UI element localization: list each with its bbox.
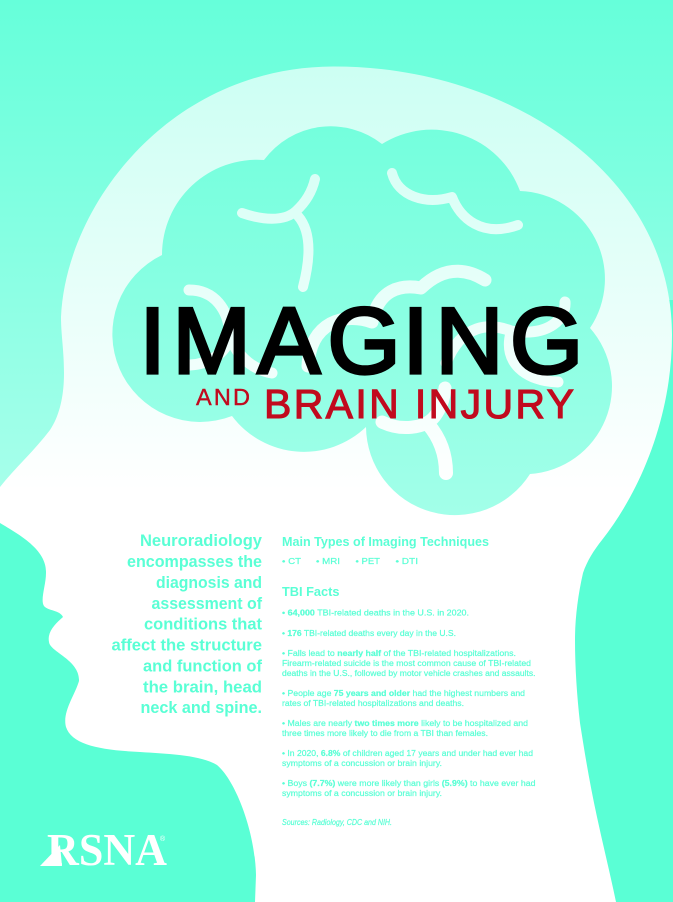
- text block: TBI facts: rates of TBI-related hospitalizations and deaths.: [282, 698, 464, 708]
- text block: TBI facts: • Males are nearly two times more likely to be hospitalized and: [282, 718, 528, 728]
- subtitle: and brain injury: AND: [196, 384, 250, 410]
- subtitle: and brain injury: BRAIN INJURY: [264, 381, 574, 427]
- neck back shape: [540, 300, 673, 902]
- text block: TBI facts: Firearm-related suicide is the most common cause of TBI-related: [282, 658, 531, 668]
- text block: TBI facts: three times more likely to die from a TBI than females.: [282, 728, 488, 738]
- text block: TBI facts: • In 2020, 6.8% of children aged 17 years and under had ever had: [282, 748, 533, 758]
- text block: TBI facts: • 176 TBI-related deaths every day in the U.S.: [282, 628, 456, 638]
- text block: neuroradiology description: conditions that: [144, 616, 262, 634]
- text block: neuroradiology description: neck and spine.: [140, 699, 262, 717]
- text block: TBI facts: • Boys (7.7%) were more likely than girls (5.9%) to have ever had: [282, 778, 536, 788]
- text block: neuroradiology description: the brain, head: [143, 678, 262, 696]
- panel: brain illustration: [112, 126, 612, 515]
- text block: neuroradiology description: [112, 532, 263, 717]
- logo: RSNA: RSNA: [47, 825, 167, 875]
- text block: neuroradiology description: and function of: [143, 658, 262, 676]
- text block: neuroradiology description: diagnosis and: [156, 574, 262, 592]
- list: imaging techniques: • DTI: [396, 556, 418, 566]
- text block: TBI facts: [282, 608, 536, 798]
- list: imaging techniques: [282, 556, 418, 566]
- text block: neuroradiology description: Neuroradiology: [140, 532, 263, 550]
- heading: TBI facts: TBI Facts: [282, 585, 340, 599]
- text block: TBI facts: symptoms of a concussion or brain injury.: [282, 758, 442, 768]
- list: imaging techniques: • PET: [356, 556, 381, 566]
- text block: TBI facts: • Falls lead to nearly half of the TBI-related hospitalizations.: [282, 648, 516, 658]
- brain folds: [189, 173, 565, 473]
- text block: TBI facts: deaths in the U.S., followed by motor vehicle crashes and assaults.: [282, 668, 536, 678]
- heading: imaging techniques: Main Types of Imaging Techniques: [282, 535, 489, 549]
- logo: RSNA: ®: [160, 835, 166, 843]
- title: IMAGING: IMAGING: [140, 288, 583, 393]
- text block: TBI facts: • 64,000 TBI-related deaths in the U.S. in 2020.: [282, 608, 469, 618]
- face and shoulder silhouette: [0, 523, 256, 902]
- text block: neuroradiology description: encompasses the: [127, 553, 262, 571]
- text block: neuroradiology description: affect the structure: [112, 636, 262, 654]
- brain shape: [112, 126, 612, 515]
- sources: Sources: Radiology, CDC and NIH.: [282, 817, 392, 827]
- list: imaging techniques: • MRI: [316, 556, 340, 566]
- text block: TBI facts: • People age 75 years and older had the highest numbers and: [282, 688, 525, 698]
- text block: TBI facts: symptoms of a concussion or brain injury.: [282, 788, 442, 798]
- list: imaging techniques: • CT: [282, 556, 302, 566]
- text block: neuroradiology description: assessment of: [152, 595, 262, 613]
